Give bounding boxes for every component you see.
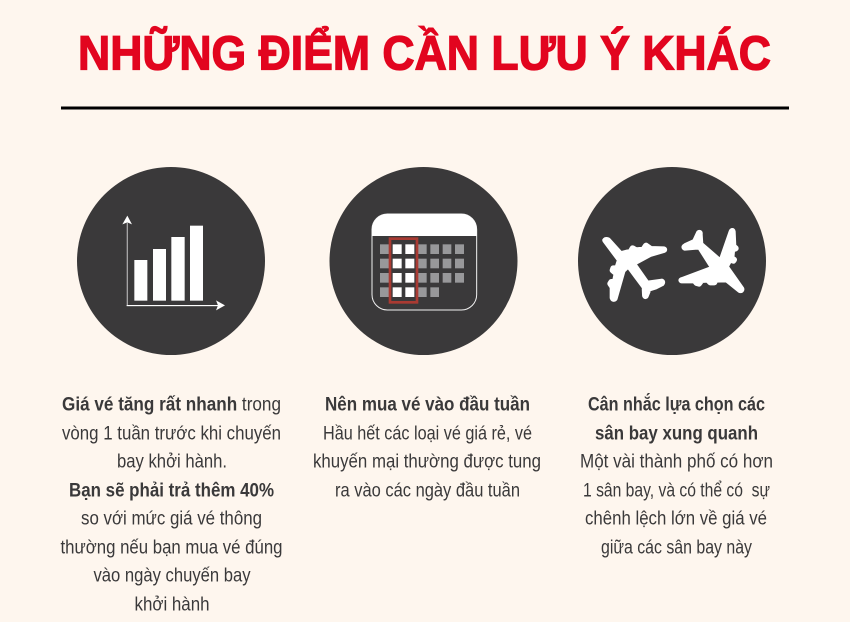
text: nearby airports: Một vài thành phố có hơn	[580, 452, 773, 472]
text: price rises: khởi hành	[134, 594, 210, 616]
title: NHỮNG ĐIỂM CẦN LƯU Ý KHÁC	[78, 26, 771, 80]
text: nearby airports: Cân nhắc lựa chọn các	[588, 394, 765, 416]
text: price rises: so với mức giá vé thông	[81, 508, 262, 530]
panel: price rises	[60, 167, 282, 616]
text: buy early in week	[313, 394, 541, 502]
text: nearby airports: giữa các sân bay này	[601, 538, 752, 558]
text: price rises: thường nếu bạn mua vé đúng	[60, 538, 282, 558]
text: price rises: vào ngày chuyến bay	[94, 566, 251, 586]
text: nearby airports: chênh lệch lớn về giá vé	[585, 508, 767, 530]
text: buy early in week: Hầu hết các loại vé giá rẻ, vé	[323, 424, 532, 444]
text: price rises	[60, 394, 282, 616]
text: price rises: Bạn sẽ phải trả thêm 40%	[69, 480, 274, 502]
panel: nearby airports	[578, 167, 773, 558]
text: price rises: Giá vé tăng rất nhanh trong	[62, 394, 281, 416]
text: buy early in week: khuyến mại thường được tung	[313, 452, 541, 472]
text: price rises: vòng 1 tuần trước khi chuyến	[62, 424, 281, 444]
text: buy early in week: Nên mua vé vào đầu tuần	[325, 394, 530, 416]
text: nearby airports	[580, 394, 773, 558]
icon: calendar	[330, 167, 518, 355]
icon: airplanes	[578, 167, 766, 355]
icon: bar chart	[77, 167, 265, 355]
text: buy early in week: ra vào các ngày đầu tuần	[335, 480, 520, 502]
text: nearby airports: sân bay xung quanh	[595, 424, 758, 444]
text: nearby airports: 1 sân bay, và có thể có sự	[583, 480, 770, 502]
text: price rises: bay khởi hành.	[117, 452, 227, 472]
panel: buy early in week	[313, 167, 541, 502]
